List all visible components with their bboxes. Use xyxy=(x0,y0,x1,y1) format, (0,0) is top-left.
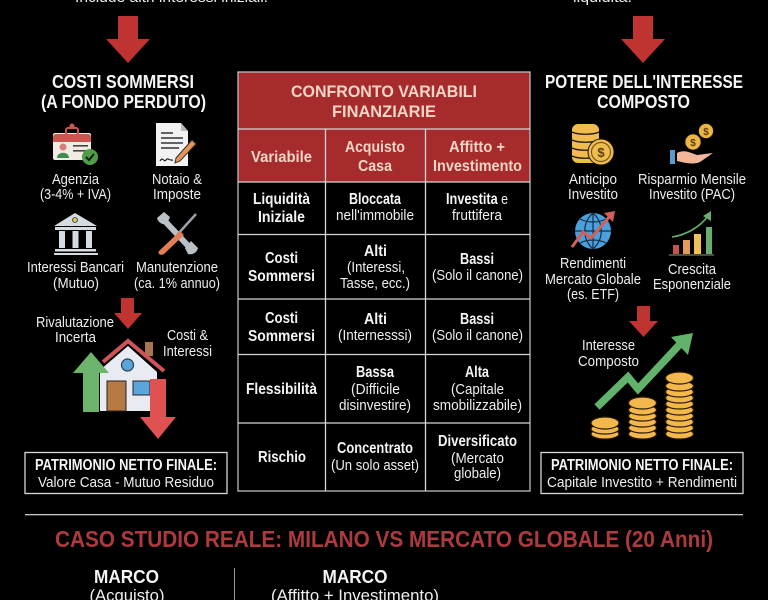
row: costi sommersi 2: (Solo il canone) xyxy=(432,327,523,344)
callout: patrimonio netto investimento: PATRIMONIO NETTO FINALE: xyxy=(551,457,733,474)
arrow: right column xyxy=(621,16,665,63)
table title: CONFRONTO VARIABILI xyxy=(291,82,477,101)
panel: interesse composto xyxy=(541,71,746,494)
row: costi sommersi 2: Sommersi xyxy=(248,328,315,345)
callout: patrimonio netto casa xyxy=(25,452,227,494)
label: rendimenti xyxy=(545,255,641,303)
row: flessibilità: (Difficile xyxy=(351,381,400,398)
row: costi sommersi 1: (Interessi, xyxy=(347,259,405,276)
table grid xyxy=(238,72,530,491)
heading: caso studio: CASO STUDIO REALE: MILANO VS MERCATO GLOBALE (20 Anni) xyxy=(55,526,713,552)
label: agenzia: (3-4% + IVA) xyxy=(40,186,111,203)
row: costi sommersi 1 xyxy=(248,243,523,292)
label: rendimenti: (es. ETF) xyxy=(567,286,619,303)
row: costi sommersi 1: Sommersi xyxy=(248,268,315,285)
label: crescita esponenziale: Crescita xyxy=(668,261,717,278)
label: interessi bancari: Interessi Bancari xyxy=(27,259,124,276)
table column headers: Affitto + xyxy=(449,139,505,156)
icon: bar chart growth xyxy=(669,211,714,255)
label: crescita esponenziale: Esponenziale xyxy=(653,276,731,293)
row: flessibilità: Alta xyxy=(465,364,489,381)
label: agenzia: Agenzia xyxy=(52,171,100,188)
icon: coins xyxy=(572,124,614,165)
row: liquidità iniziale: Iniziale xyxy=(258,209,305,226)
label: notaio: Notaio & xyxy=(152,171,202,188)
label: manutenzione xyxy=(134,259,220,292)
row: liquidità iniziale: Investita e xyxy=(446,191,508,208)
row: liquidità iniziale: Liquidità xyxy=(253,191,310,208)
heading: potere dell'interesse composto: COMPOSTO xyxy=(597,91,690,112)
label: crescita esponenziale xyxy=(653,261,731,293)
label: agenzia xyxy=(40,171,111,203)
row: costi sommersi 1: Alti xyxy=(364,243,387,260)
row: costi sommersi 2: Bassi xyxy=(460,311,494,328)
icon: coins: $ xyxy=(597,145,605,160)
label: risparmio mensile: Investito (PAC) xyxy=(649,186,735,203)
table header background xyxy=(238,72,530,182)
row: rischio: Concentrato xyxy=(337,440,413,457)
callout: patrimonio netto casa: PATRIMONIO NETTO FINALE: xyxy=(35,457,217,474)
heading: costi sommersi: (A FONDO PERDUTO) xyxy=(41,91,206,112)
heading: costi sommersi: COSTI SOMMERSI xyxy=(52,71,194,92)
panel: caso studio xyxy=(25,514,743,600)
row: costi sommersi 1: (Solo il canone) xyxy=(432,267,523,284)
row: costi sommersi 2: Costi xyxy=(265,310,298,327)
row: liquidità iniziale xyxy=(253,191,508,226)
row: liquidità iniziale: Bloccata xyxy=(349,191,401,208)
callout: patrimonio netto investimento xyxy=(541,452,743,494)
column: marco affitto: MARCO xyxy=(322,566,388,587)
table column headers xyxy=(251,139,522,175)
table title: FINANZIARIE xyxy=(332,102,436,121)
table title xyxy=(291,82,477,121)
callout: patrimonio netto investimento: Capitale Investito + Rendimenti xyxy=(547,474,737,491)
arrow: left column xyxy=(106,16,150,63)
icon: hand with coins: $ xyxy=(690,138,696,149)
icon: hand with coins: $ xyxy=(703,127,709,138)
label: manutenzione: Manutenzione xyxy=(136,259,218,276)
row: costi sommersi 1: Costi xyxy=(265,250,298,267)
icon: notaio document xyxy=(156,123,196,166)
label: interessi bancari xyxy=(27,259,124,292)
label: rivalutazione: Rivalutazione xyxy=(36,314,114,331)
row: rischio: Diversificato xyxy=(438,433,517,450)
icon: hand with coins xyxy=(670,124,714,164)
icon: house with arrows xyxy=(73,341,176,439)
row: rischio: Rischio xyxy=(258,449,306,466)
row: rischio: (Un solo asset) xyxy=(331,457,419,474)
label: risparmio mensile: Risparmio Mensile xyxy=(638,171,746,188)
table column headers: Acquisto xyxy=(345,139,405,156)
label: rendimenti: Rendimenti xyxy=(560,255,626,272)
icon: globe with arrow xyxy=(572,211,615,249)
label: rivalutazione: Incerta xyxy=(55,329,97,346)
heading: costi sommersi xyxy=(41,71,206,112)
row: costi sommersi 1: Bassi xyxy=(460,251,494,268)
label: costi e interessi: Interessi xyxy=(163,343,212,360)
column: marco affitto xyxy=(271,566,439,600)
arrow: small left xyxy=(114,298,142,329)
icon: manutenzione tools xyxy=(157,212,198,255)
table column headers: Variabile xyxy=(251,149,312,166)
icon: agenzia badge xyxy=(53,124,98,165)
row: costi sommersi 2: Alti xyxy=(364,311,387,328)
icon: banca xyxy=(54,213,98,255)
label: interessi bancari: (Mutuo) xyxy=(53,275,99,292)
label: anticipo investito: Investito xyxy=(568,186,618,203)
row: flessibilità: disinvestire) xyxy=(339,397,411,414)
row: flessibilità: (Capitale xyxy=(451,381,504,398)
label: interesse composto xyxy=(578,337,639,370)
column: marco acquisto xyxy=(90,566,164,600)
label: notaio xyxy=(152,171,202,203)
icon: growth arrow with coin stacks xyxy=(591,333,694,439)
panel: confronto table xyxy=(238,72,530,491)
callout: patrimonio netto casa: Valore Casa - Mutuo Residuo xyxy=(38,474,214,491)
row: flessibilità: smobilizzabile) xyxy=(433,397,522,414)
row: liquidità iniziale: fruttifera xyxy=(452,207,503,224)
row: flessibilità: Bassa xyxy=(356,364,394,381)
row: flessibilità: Flessibilità xyxy=(246,381,317,398)
heading: potere dell'interesse composto xyxy=(545,71,743,112)
label: rivalutazione xyxy=(36,314,114,346)
label: interesse composto: Composto xyxy=(578,353,639,370)
row: liquidità iniziale: nell'immobile xyxy=(336,207,414,224)
row: flessibilità xyxy=(246,364,522,414)
row: rischio: (Mercato xyxy=(451,450,504,467)
label: manutenzione: (ca. 1% annuo) xyxy=(134,275,220,292)
panel: costi sommersi xyxy=(25,71,227,494)
arrow: small right xyxy=(629,306,658,337)
label: risparmio mensile xyxy=(638,171,746,203)
label: costi e interessi: Costi & xyxy=(167,327,208,344)
row: rischio xyxy=(258,433,517,482)
row: costi sommersi 1: Tasse, ecc.) xyxy=(340,275,410,292)
row: costi sommersi 2: (Internesssi) xyxy=(338,327,412,344)
column: marco acquisto: MARCO xyxy=(94,566,159,587)
divider xyxy=(234,568,235,600)
label: notaio: Imposte xyxy=(153,186,201,203)
table column headers: Investimento xyxy=(433,158,522,175)
row: rischio: globale) xyxy=(454,465,501,482)
table column headers: Casa xyxy=(358,158,392,175)
label: anticipo investito xyxy=(568,171,618,203)
label: interesse composto: Interesse xyxy=(582,337,635,354)
label: rendimenti: Mercato Globale xyxy=(545,271,641,288)
row: costi sommersi 2 xyxy=(248,310,523,345)
label: costi e interessi xyxy=(163,327,212,360)
label: anticipo investito: Anticipo xyxy=(569,171,617,188)
